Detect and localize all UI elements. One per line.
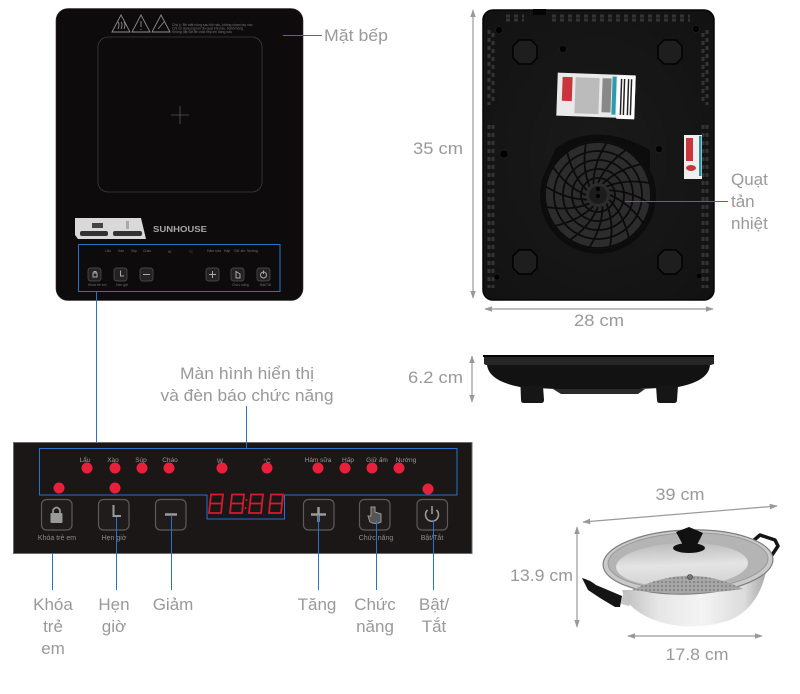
indicator LEDs xyxy=(54,462,434,494)
fan housing xyxy=(540,134,656,254)
callout: Chức năng: năng xyxy=(356,617,394,636)
heading: display and function lights: Màn hình hiển thị xyxy=(180,364,314,383)
side top plate xyxy=(484,355,714,365)
side vents xyxy=(489,30,707,288)
side glass edge xyxy=(483,355,714,357)
mode labels: Lẩu xyxy=(105,249,111,253)
dimension: 17.8 cm: 17.8 cm xyxy=(666,645,728,664)
panel: side view of the cooktop xyxy=(483,355,714,403)
panel: underside view xyxy=(483,9,714,300)
icon: minus xyxy=(165,513,177,516)
small button captions: Khóa trẻ em xyxy=(88,283,107,287)
LED function labels: Hấp xyxy=(342,455,354,464)
icon: touch hand xyxy=(368,507,381,524)
small button glyphs xyxy=(93,270,266,278)
warning text: Không đặt vật lên mặt bếp khi đang nấu xyxy=(172,30,232,34)
callout: Khóa trẻ em: Khóa xyxy=(33,595,73,614)
LED function labels: W xyxy=(217,458,224,465)
mode labels: °C xyxy=(189,250,193,254)
power cord notch xyxy=(533,9,546,15)
callout: Khóa trẻ em: trẻ xyxy=(43,617,63,636)
cooktop glass surface xyxy=(56,8,303,300)
pot left bracket xyxy=(621,592,632,606)
button captions: Bật/Tắt xyxy=(421,533,443,542)
dimension: 6.2 cm height: 6.2 cm xyxy=(408,368,463,387)
display colon xyxy=(246,499,247,509)
icon: cooling fan grille xyxy=(544,141,652,249)
panel: hot pot xyxy=(582,527,778,627)
icon: power xyxy=(425,506,439,521)
callout: Mặt bếp xyxy=(283,26,388,45)
icon: timer xyxy=(114,505,121,516)
callout: Giảm: Giảm xyxy=(153,595,193,614)
pot rim xyxy=(602,527,774,597)
warning text: Chỉ sử dụng nguồn đủ quạt khi nấu, tránh hỏng xyxy=(172,26,243,30)
mode labels: Hấp xyxy=(224,249,230,253)
small button captions xyxy=(88,282,271,287)
LED function labels xyxy=(80,455,417,465)
button captions: Hẹn giờ xyxy=(102,535,127,542)
mode labels: Súp xyxy=(131,249,137,253)
mode labels: Cháo xyxy=(143,249,151,253)
seven-segment display xyxy=(209,494,283,513)
callout: Bật/Tắt: Tắt xyxy=(422,617,447,636)
callout: Giảm xyxy=(153,515,193,614)
dimension: 13.9 cm: 13.9 cm xyxy=(510,566,573,585)
brand name: SUNHOUSE xyxy=(153,224,207,234)
callout: Chức năng xyxy=(354,520,396,636)
LED function labels: °C xyxy=(263,457,271,465)
warning text xyxy=(172,23,253,34)
mode labels: Nướng xyxy=(247,249,258,253)
top vents xyxy=(506,16,690,20)
dimension: 13.9 cm xyxy=(510,527,577,627)
pot interior xyxy=(615,541,749,589)
callout: Quạt tản nhiệt: nhiệt xyxy=(731,214,768,233)
centre cross mark xyxy=(171,106,189,124)
icon: warning triangles xyxy=(112,15,170,32)
panel: top view of the cooktop xyxy=(56,8,303,300)
rubber feet xyxy=(513,40,682,274)
LED function labels: Lẩu xyxy=(80,456,91,464)
callout: Khóa trẻ em xyxy=(33,553,73,658)
LED function labels: Hâm sữa xyxy=(305,457,332,464)
heading: display and function lights xyxy=(160,364,334,405)
small control buttons xyxy=(88,268,270,281)
small button captions: Hẹn giờ xyxy=(116,283,129,287)
side feet xyxy=(520,386,678,403)
warning text: Chú ý: Bề mặt nóng sau khi nấu, không chạm tay vào xyxy=(172,23,253,27)
side fan bottom xyxy=(553,389,645,394)
dimension: 39 cm xyxy=(583,485,777,522)
LED function labels: Cháo xyxy=(162,457,178,464)
callout: Quạt tản nhiệt: Quạt xyxy=(731,170,768,189)
control panel background xyxy=(14,442,472,554)
callout: display outline xyxy=(40,406,457,519)
mode labels: Hâm sữa xyxy=(207,249,221,253)
pot knob xyxy=(673,527,705,553)
mode labels xyxy=(105,249,258,254)
small button captions: Chức năng xyxy=(232,283,249,287)
panel: enlarged control panel xyxy=(14,442,472,554)
callout: Bật/Tắt xyxy=(419,520,449,636)
control buttons xyxy=(42,500,448,530)
dimension: 6.2 cm height xyxy=(408,356,472,402)
pot right handle xyxy=(753,535,778,555)
heading: display and function lights: và đèn báo chức năng xyxy=(160,386,334,405)
LED function labels: Xào xyxy=(107,457,119,464)
LED function labels: Giữ ấm xyxy=(366,455,388,464)
dimension: 17.8 cm xyxy=(628,636,762,664)
callout: Quạt tản nhiệt xyxy=(625,170,768,233)
small button captions: Bật/Tắt xyxy=(260,282,271,287)
callout: Quạt tản nhiệt: tản xyxy=(731,192,755,211)
product label sticker xyxy=(556,73,636,119)
icon: lock xyxy=(50,508,62,523)
cooking zone outline xyxy=(98,37,262,192)
callout: Chức năng: Chức xyxy=(354,595,396,614)
dimension: 39 cm: 39 cm xyxy=(656,485,704,504)
LED function labels: Nướng xyxy=(396,457,417,464)
pot steamer base xyxy=(632,576,743,593)
screw holes xyxy=(494,26,702,280)
side body xyxy=(487,365,710,389)
mode labels: Xào xyxy=(118,249,124,253)
callout: Mặt bếp: Mặt bếp xyxy=(324,26,388,45)
dimension: 35 cm height: 35 cm xyxy=(413,139,463,158)
button captions: Khóa trẻ em xyxy=(38,535,76,542)
button captions: Chức năng xyxy=(359,535,393,542)
pot lid glass edge xyxy=(607,530,769,592)
mode labels: W xyxy=(168,250,172,254)
small side sticker xyxy=(684,135,702,179)
energy sticker xyxy=(75,218,146,239)
mode labels: Giữ ấm xyxy=(234,249,245,253)
callout: Hẹn giờ: giờ xyxy=(102,617,126,636)
underside body xyxy=(483,10,714,300)
pot left handle xyxy=(582,578,622,607)
callout: Tăng: Tăng xyxy=(298,595,336,614)
pot lid vent xyxy=(688,574,692,580)
callout: Tăng xyxy=(298,515,336,614)
icon: plus xyxy=(311,507,326,522)
callout: Khóa trẻ em: em xyxy=(41,639,65,658)
pot body xyxy=(622,572,766,627)
callout: Hẹn giờ: Hẹn xyxy=(98,595,130,614)
button captions xyxy=(38,533,443,542)
callout: control panel highlight xyxy=(78,244,280,443)
callout: Bật/Tắt: Bật/ xyxy=(419,595,449,614)
dimension: 28 cm width: 28 cm xyxy=(574,311,624,330)
LED function labels: Súp xyxy=(135,457,147,464)
callout: Hẹn giờ xyxy=(98,517,130,636)
